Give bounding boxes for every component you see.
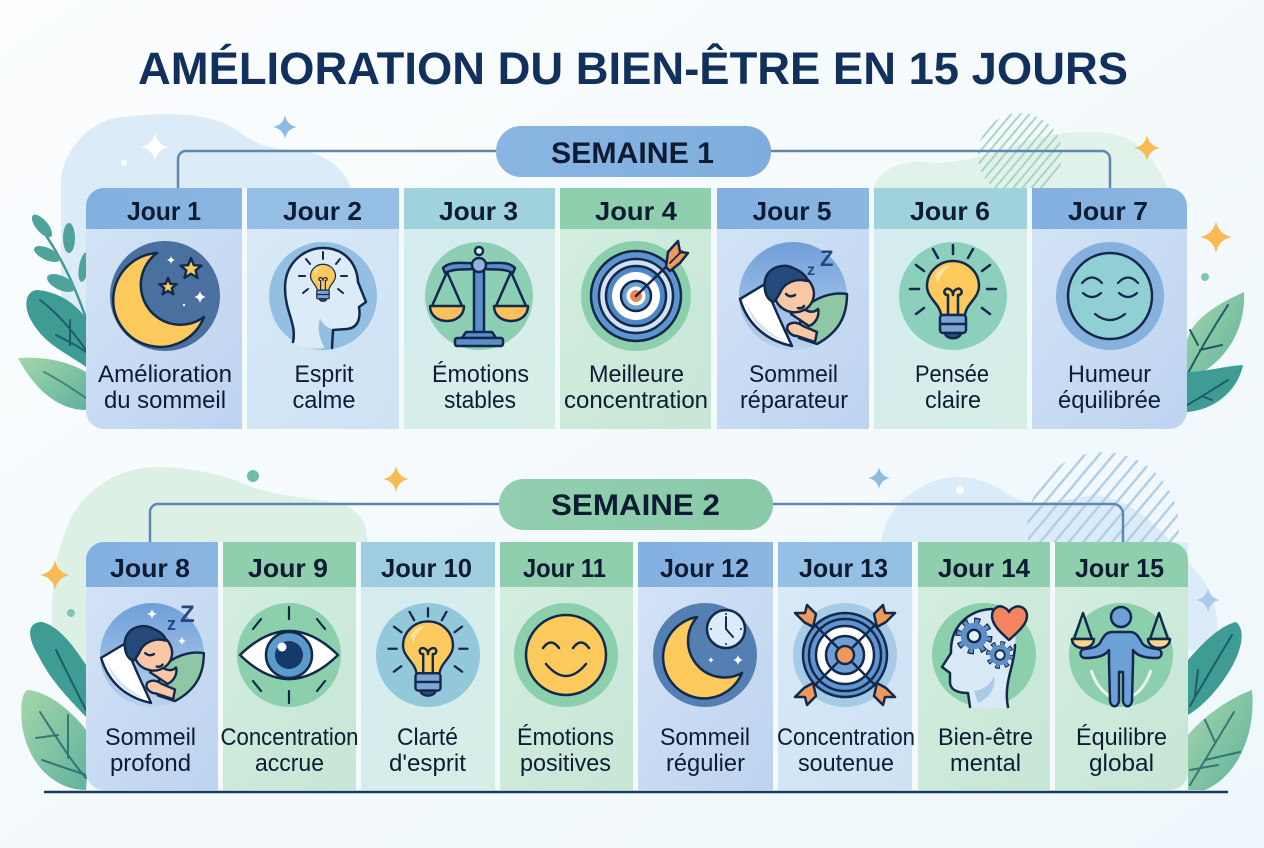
- heading: semaine 2: SEMAINE 2: [551, 489, 720, 522]
- icon: balance scales: [425, 242, 533, 350]
- card: jour 13: Concentration: [777, 724, 915, 751]
- icon: moon and stars: [110, 241, 220, 351]
- card: jour 5: Sommeil: [749, 361, 838, 388]
- icon: sleeping person: z: [807, 262, 815, 279]
- card: jour 12: [638, 542, 773, 790]
- card: jour 11: [500, 542, 633, 790]
- card: jour 7: équilibrée: [1058, 387, 1161, 414]
- card: jour 10: d'esprit: [389, 750, 466, 777]
- icon: moon and clock: [653, 603, 757, 707]
- card: jour 13: [777, 542, 915, 790]
- icon: calm face: [1056, 242, 1164, 350]
- card: jour 5: [717, 188, 869, 429]
- card: jour 1: Jour 1: [127, 196, 201, 226]
- card: jour 14: Jour 14: [938, 553, 1031, 583]
- icon: smiling face: [514, 603, 618, 707]
- card: jour 2: calme: [292, 387, 356, 414]
- icon: person balancing scales: [1069, 603, 1173, 707]
- card: jour 15: [1055, 542, 1188, 790]
- decorations: week 2 left: [21, 466, 409, 790]
- card: jour 2: [247, 188, 399, 429]
- card: jour 11: positives: [520, 750, 611, 777]
- card: jour 12: Jour 12: [660, 553, 749, 583]
- decorations: week 2 right: [868, 452, 1253, 790]
- card: jour 11: Émotions: [517, 724, 614, 751]
- heading: semaine 1: [496, 126, 771, 177]
- decorations: week 1 left: [18, 114, 351, 410]
- icon: target with arrow: [581, 241, 691, 351]
- heading: semaine 1: SEMAINE 1: [551, 137, 714, 170]
- card: jour 10: Jour 10: [381, 553, 472, 583]
- card: jour 7: Jour 7: [1068, 196, 1148, 226]
- card: jour 6: Pensée: [915, 361, 989, 388]
- panel: week 2: [86, 542, 1188, 790]
- card: jour 3: Émotions: [432, 361, 529, 388]
- card: jour 15: Jour 15: [1075, 553, 1164, 583]
- card: jour 14: Bien-être: [938, 724, 1033, 751]
- card: jour 4: Meilleure: [589, 361, 684, 388]
- card: jour 7: Humeur: [1068, 361, 1151, 388]
- card: jour 11: Jour 11: [523, 553, 606, 583]
- card: jour 10: Clarté: [397, 724, 458, 751]
- title: AMÉLIORATION DU BIEN-ÊTRE EN 15 JOURS: [138, 43, 1128, 94]
- card: jour 15: Équilibre: [1076, 724, 1167, 751]
- icon: deep sleep: [100, 601, 204, 707]
- card: jour 2: Esprit: [294, 361, 354, 388]
- card: jour 3: Jour 3: [439, 196, 518, 226]
- card: jour 9: accrue: [255, 750, 324, 777]
- panel: week 1: [86, 188, 1187, 429]
- card: jour 13: soutenue: [798, 750, 894, 777]
- card: jour 2: Jour 2: [283, 196, 362, 226]
- card: jour 5: réparateur: [740, 387, 848, 414]
- icon: head with light bulb: [269, 242, 377, 350]
- card: jour 9: Jour 9: [248, 553, 328, 583]
- card: jour 6: Jour 6: [910, 196, 990, 226]
- card: jour 8: [86, 542, 218, 790]
- card: jour 14: mental: [950, 750, 1021, 777]
- baseline rule: [44, 791, 1228, 793]
- icon: deep sleep: Z: [180, 601, 195, 628]
- heading: semaine 2: [499, 479, 773, 530]
- card: jour 15: global: [1089, 750, 1154, 777]
- icon: light bulb: [899, 242, 1007, 350]
- card: jour 5: Jour 5: [752, 196, 832, 226]
- card: jour 6: [874, 188, 1027, 429]
- card: jour 14: [918, 542, 1050, 790]
- card: jour 4: Jour 4: [595, 196, 678, 226]
- icon: deep sleep: z: [167, 614, 176, 634]
- card: jour 8: profond: [110, 750, 191, 777]
- connector: week 2: [150, 504, 1123, 542]
- connector: week 1: [178, 151, 1110, 188]
- icon: eye: [237, 603, 341, 707]
- icon: sleeping person: Z: [820, 246, 833, 271]
- icon: sleeping person: [739, 242, 847, 350]
- card: jour 1: [86, 188, 242, 429]
- card: jour 13: Jour 13: [799, 553, 888, 583]
- card: jour 12: régulier: [666, 750, 745, 777]
- card: jour 3: stables: [444, 387, 516, 414]
- icon: light bulb: [376, 603, 480, 707]
- card: jour 9: Concentration: [220, 724, 358, 751]
- card: jour 4: concentration: [564, 387, 708, 414]
- card: jour 4: [560, 188, 711, 429]
- card: jour 8: Jour 8: [110, 553, 190, 583]
- card: jour 1: Amélioration: [98, 361, 232, 388]
- icon: target with four arrows: [793, 603, 897, 707]
- decorations: week 1 right: [873, 113, 1244, 412]
- icon: head with gears and heart: [932, 603, 1036, 708]
- card: jour 7: [1032, 188, 1187, 429]
- card: jour 1: du sommeil: [104, 387, 226, 414]
- card: jour 9: [220, 542, 358, 790]
- card: jour 3: [404, 188, 555, 429]
- card: jour 8: Sommeil: [105, 724, 196, 751]
- card: jour 6: claire: [925, 387, 981, 414]
- card: jour 12: Sommeil: [660, 724, 750, 751]
- card: jour 10: [361, 542, 495, 790]
